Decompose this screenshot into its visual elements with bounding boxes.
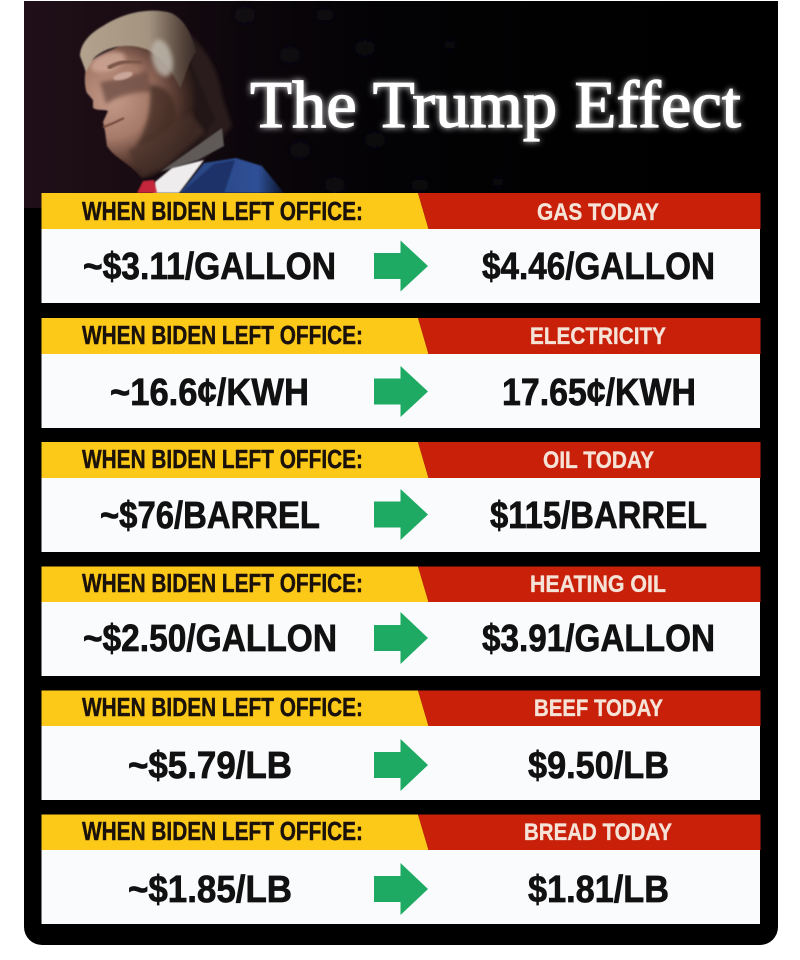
yellow label: WHEN BIDEN LEFT OFFICE: [82, 694, 363, 722]
portrait: eye socket [100, 70, 152, 104]
red label: BREAD TODAY [524, 819, 672, 846]
portrait: shirt [153, 160, 204, 193]
portrait: eyelid [112, 70, 134, 82]
red header [418, 193, 760, 229]
white value band [42, 354, 760, 428]
row: electricity [42, 318, 760, 428]
portrait: forehead highlight [88, 48, 128, 76]
white value band [42, 726, 760, 800]
row: heating oil [42, 566, 760, 676]
portrait: cheek shadow [135, 85, 176, 148]
red header [418, 814, 760, 850]
yellow header [42, 318, 428, 354]
today value: $1.81/LB [528, 869, 669, 911]
row: gas [42, 193, 760, 303]
arrow [374, 863, 428, 915]
yellow label: WHEN BIDEN LEFT OFFICE: [82, 446, 363, 474]
red label: BEEF TODAY [534, 695, 663, 722]
before value: ~$1.85/LB [128, 869, 292, 911]
faint star field [238, 8, 503, 192]
row: beef [42, 690, 760, 800]
white value band [42, 850, 760, 924]
portrait: hair highlight [147, 37, 177, 79]
red label: GAS TODAY [537, 199, 659, 226]
portrait [80, 11, 284, 193]
white value band [42, 478, 760, 552]
white value band [42, 229, 760, 303]
title: The Trump Effect [250, 68, 741, 142]
yellow label: WHEN BIDEN LEFT OFFICE: [82, 198, 363, 226]
header background [24, 1, 778, 208]
portrait: collar [160, 128, 224, 172]
portrait: rear head shadow [130, 15, 232, 170]
arrow [374, 240, 428, 292]
arrow [374, 739, 428, 791]
today value: $9.50/LB [528, 745, 669, 787]
before value: ~16.6¢/KWH [110, 372, 309, 414]
white value band [42, 602, 760, 676]
before value: ~$2.50/GALLON [83, 618, 337, 660]
portrait: mouth line [103, 118, 124, 127]
red label: HEATING OIL [530, 571, 666, 598]
yellow header [42, 814, 428, 850]
red header [418, 442, 760, 478]
today value: $3.91/GALLON [482, 618, 715, 660]
yellow label: WHEN BIDEN LEFT OFFICE: [82, 818, 363, 846]
portrait: lapel [181, 160, 235, 193]
portrait: hair [80, 11, 196, 88]
yellow header [42, 193, 428, 229]
portrait: face and neck [85, 30, 215, 178]
row: oil [42, 442, 760, 552]
red label: ELECTRICITY [530, 323, 666, 350]
yellow label: WHEN BIDEN LEFT OFFICE: [82, 570, 363, 598]
today value: $4.46/GALLON [482, 246, 715, 288]
yellow header [42, 442, 428, 478]
yellow label: WHEN BIDEN LEFT OFFICE: [82, 322, 363, 350]
today value: $115/BARREL [490, 495, 707, 537]
before value: ~$76/BARREL [100, 495, 320, 537]
yellow header [42, 566, 428, 602]
portrait: suit [180, 158, 284, 193]
arrow [374, 489, 428, 540]
yellow header [42, 690, 428, 726]
before value: ~$3.11/GALLON [83, 246, 336, 288]
today value: 17.65¢/KWH [502, 372, 696, 414]
arrow [374, 612, 428, 664]
title glow: The Trump Effect [250, 68, 741, 142]
arrow [374, 366, 428, 417]
red header [418, 566, 760, 602]
portrait: jaw shadow [128, 112, 205, 177]
before value: ~$5.79/LB [128, 745, 292, 787]
portrait: tie [137, 180, 157, 193]
portrait: brow [108, 61, 142, 68]
red label: OIL TODAY [543, 447, 654, 474]
red header [418, 318, 760, 354]
row: bread [42, 814, 760, 924]
red header [418, 690, 760, 726]
